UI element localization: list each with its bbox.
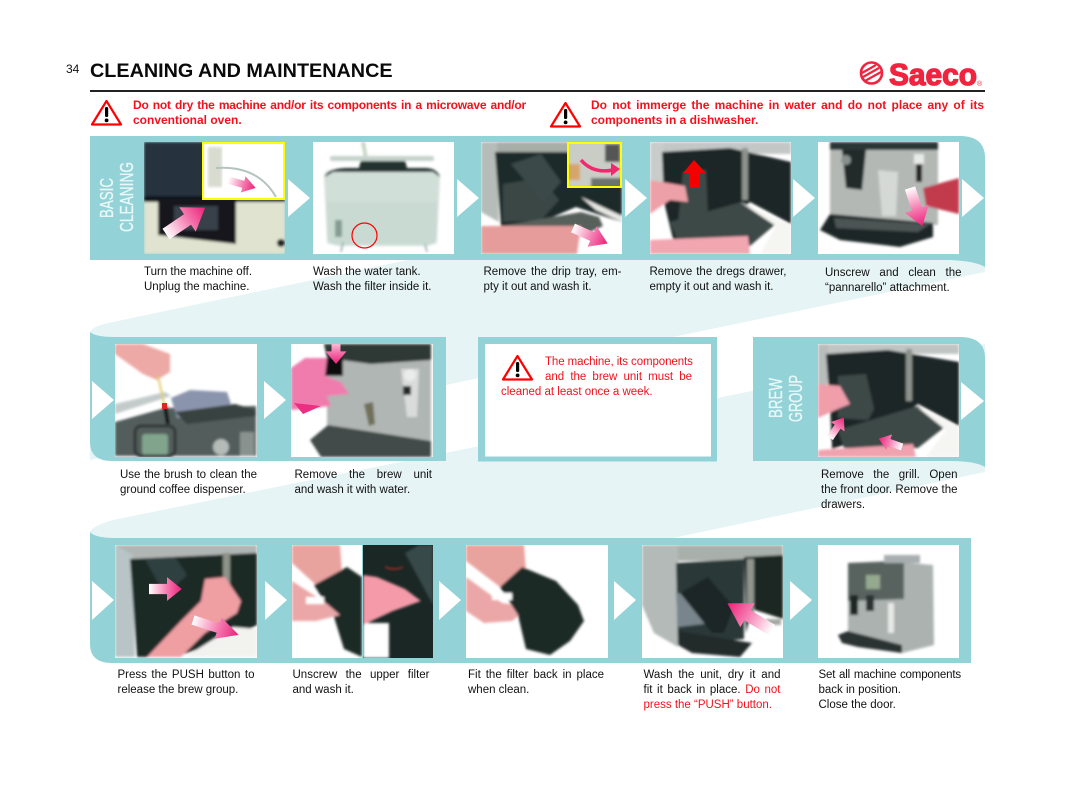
icon: red circle [352,223,377,248]
band: brew group [753,337,985,467]
photo: dregs drawer [650,142,791,254]
callout text [501,356,693,398]
caption: step 1: Unplug the machine. [144,281,249,293]
logo: Saeco: Saeco [889,57,977,92]
caption: step 12: press the “PUSH” button. [644,699,772,711]
label: basic cleaning: CLEANING [117,162,137,232]
band: row 2 left [90,332,446,461]
caption: step 3: Remove the drip tray, em- [484,266,622,278]
caption: step 13 [818,669,961,711]
caption: step 7 [294,469,432,496]
photo: brew group door [818,344,959,457]
caption: step 3 [484,266,622,293]
caption: step 13: Set all machine components [818,669,961,681]
band: row 3 [90,532,971,663]
callout text: cleaned at least once a week. [501,386,653,398]
caption: step 8 [821,469,958,511]
caption: step 4: empty it out and wash it. [650,281,774,293]
warning text: microwave: Do not dry the machine and/or its components in a microwave and/or [133,98,526,112]
logo: Saeco: ® [977,80,983,88]
label: basic cleaning: BASIC [97,178,117,218]
caption: step 11 [468,669,604,696]
swoosh: pale connector from row 1 to row 2 [90,260,985,460]
callout text: and the brew unit must be [545,371,692,383]
label: brew group [766,375,806,422]
caption: step 5: Unscrew and clean the [825,267,962,279]
caption: step 5 [825,267,962,294]
caption: step 6: Use the brush to clean the [120,469,257,481]
callout panel inner [485,344,711,456]
photo: unscrew filter right [363,545,433,658]
caption: step 4 [650,266,786,293]
caption: step 12: fit it back in place. Do not [644,684,780,696]
icon: warning triangle in callout [503,356,532,380]
warning text: immersion: components in a dishwasher. [591,113,758,127]
caption: step 9: release the brew group. [118,684,238,696]
label: brew group: BREW [766,378,786,418]
photo: remove brew unit [291,344,433,457]
photo: unplug machine [144,142,285,254]
inset: wall plug [203,143,284,199]
band: basic cleaning row [90,136,985,267]
caption: step 2 [313,266,431,293]
caption: step 10: and wash it. [292,684,354,696]
header rule [90,90,985,92]
caption: step 4: Remove the dregs drawer, [650,266,786,278]
swoosh: pale connector from row 2 to row 3 [90,344,985,538]
caption: step 13: Close the door. [818,699,896,711]
caption: step 2: Wash the water tank. [313,266,421,278]
warning text: microwave: conventional oven. [133,113,242,127]
photo: drip tray [481,142,622,254]
callout text: The machine, its components [545,356,693,368]
photo: pannarello [818,142,959,254]
photo: unscrew filter left [292,545,362,658]
caption: step 7: and wash it with water. [294,484,410,496]
caption: step 2: Wash the filter inside it. [313,281,431,293]
caption: step 13: back in position. [818,684,901,696]
caption: step 10 [292,669,430,696]
caption: step 8: the front door. Remove the [821,484,958,496]
icon: red up arrow [683,160,706,188]
photo: fit filter back [466,545,608,658]
label: brew group: GROUP [786,375,806,422]
photo: push button [115,545,257,658]
caption: step 6: ground coffee dispenser. [120,484,246,496]
caption: step 8: drawers. [821,499,865,511]
photo: brush on coffee dispenser [115,344,257,457]
warning text: microwave [133,98,526,127]
caption: step 1: Turn the machine off. [144,266,252,278]
caption: step 9: Press the PUSH button to [118,669,254,681]
caption: step 9 [118,669,254,696]
icon: warning triangle 2 [551,103,580,126]
photo: water tank [313,142,454,254]
caption: step 7: Remove the brew unit [294,469,432,481]
icon: warning triangle 1 [92,101,121,124]
caption: step 12: Wash the unit, dry it and [644,669,780,681]
callout panel frame [478,337,717,462]
warning text: immersion: Do not immerge the machine in water and do not place any of its [591,98,984,112]
caption: step 5: “pannarello” attachment. [825,282,950,294]
flow arrows [92,179,984,620]
warning text: immersion [591,98,984,127]
caption: step 3: pty it out and wash it. [484,281,592,293]
caption: step 11: Fit the filter back in place [468,669,604,681]
title: CLEANING AND MAINTENANCE [90,60,393,82]
caption: step 1 [144,266,252,293]
label: basic cleaning [97,162,137,232]
caption: step 8: Remove the grill. Open [821,469,958,481]
caption: step 6 [120,469,257,496]
inset: drip tray side view [567,142,622,188]
caption: step 11: when clean. [468,684,529,696]
page number: 34 [66,62,79,76]
caption: step 10: Unscrew the upper filter [292,669,430,681]
photo: finished machine [818,545,959,658]
photo: refit brew unit [642,545,783,658]
caption: step 12 [644,669,780,711]
